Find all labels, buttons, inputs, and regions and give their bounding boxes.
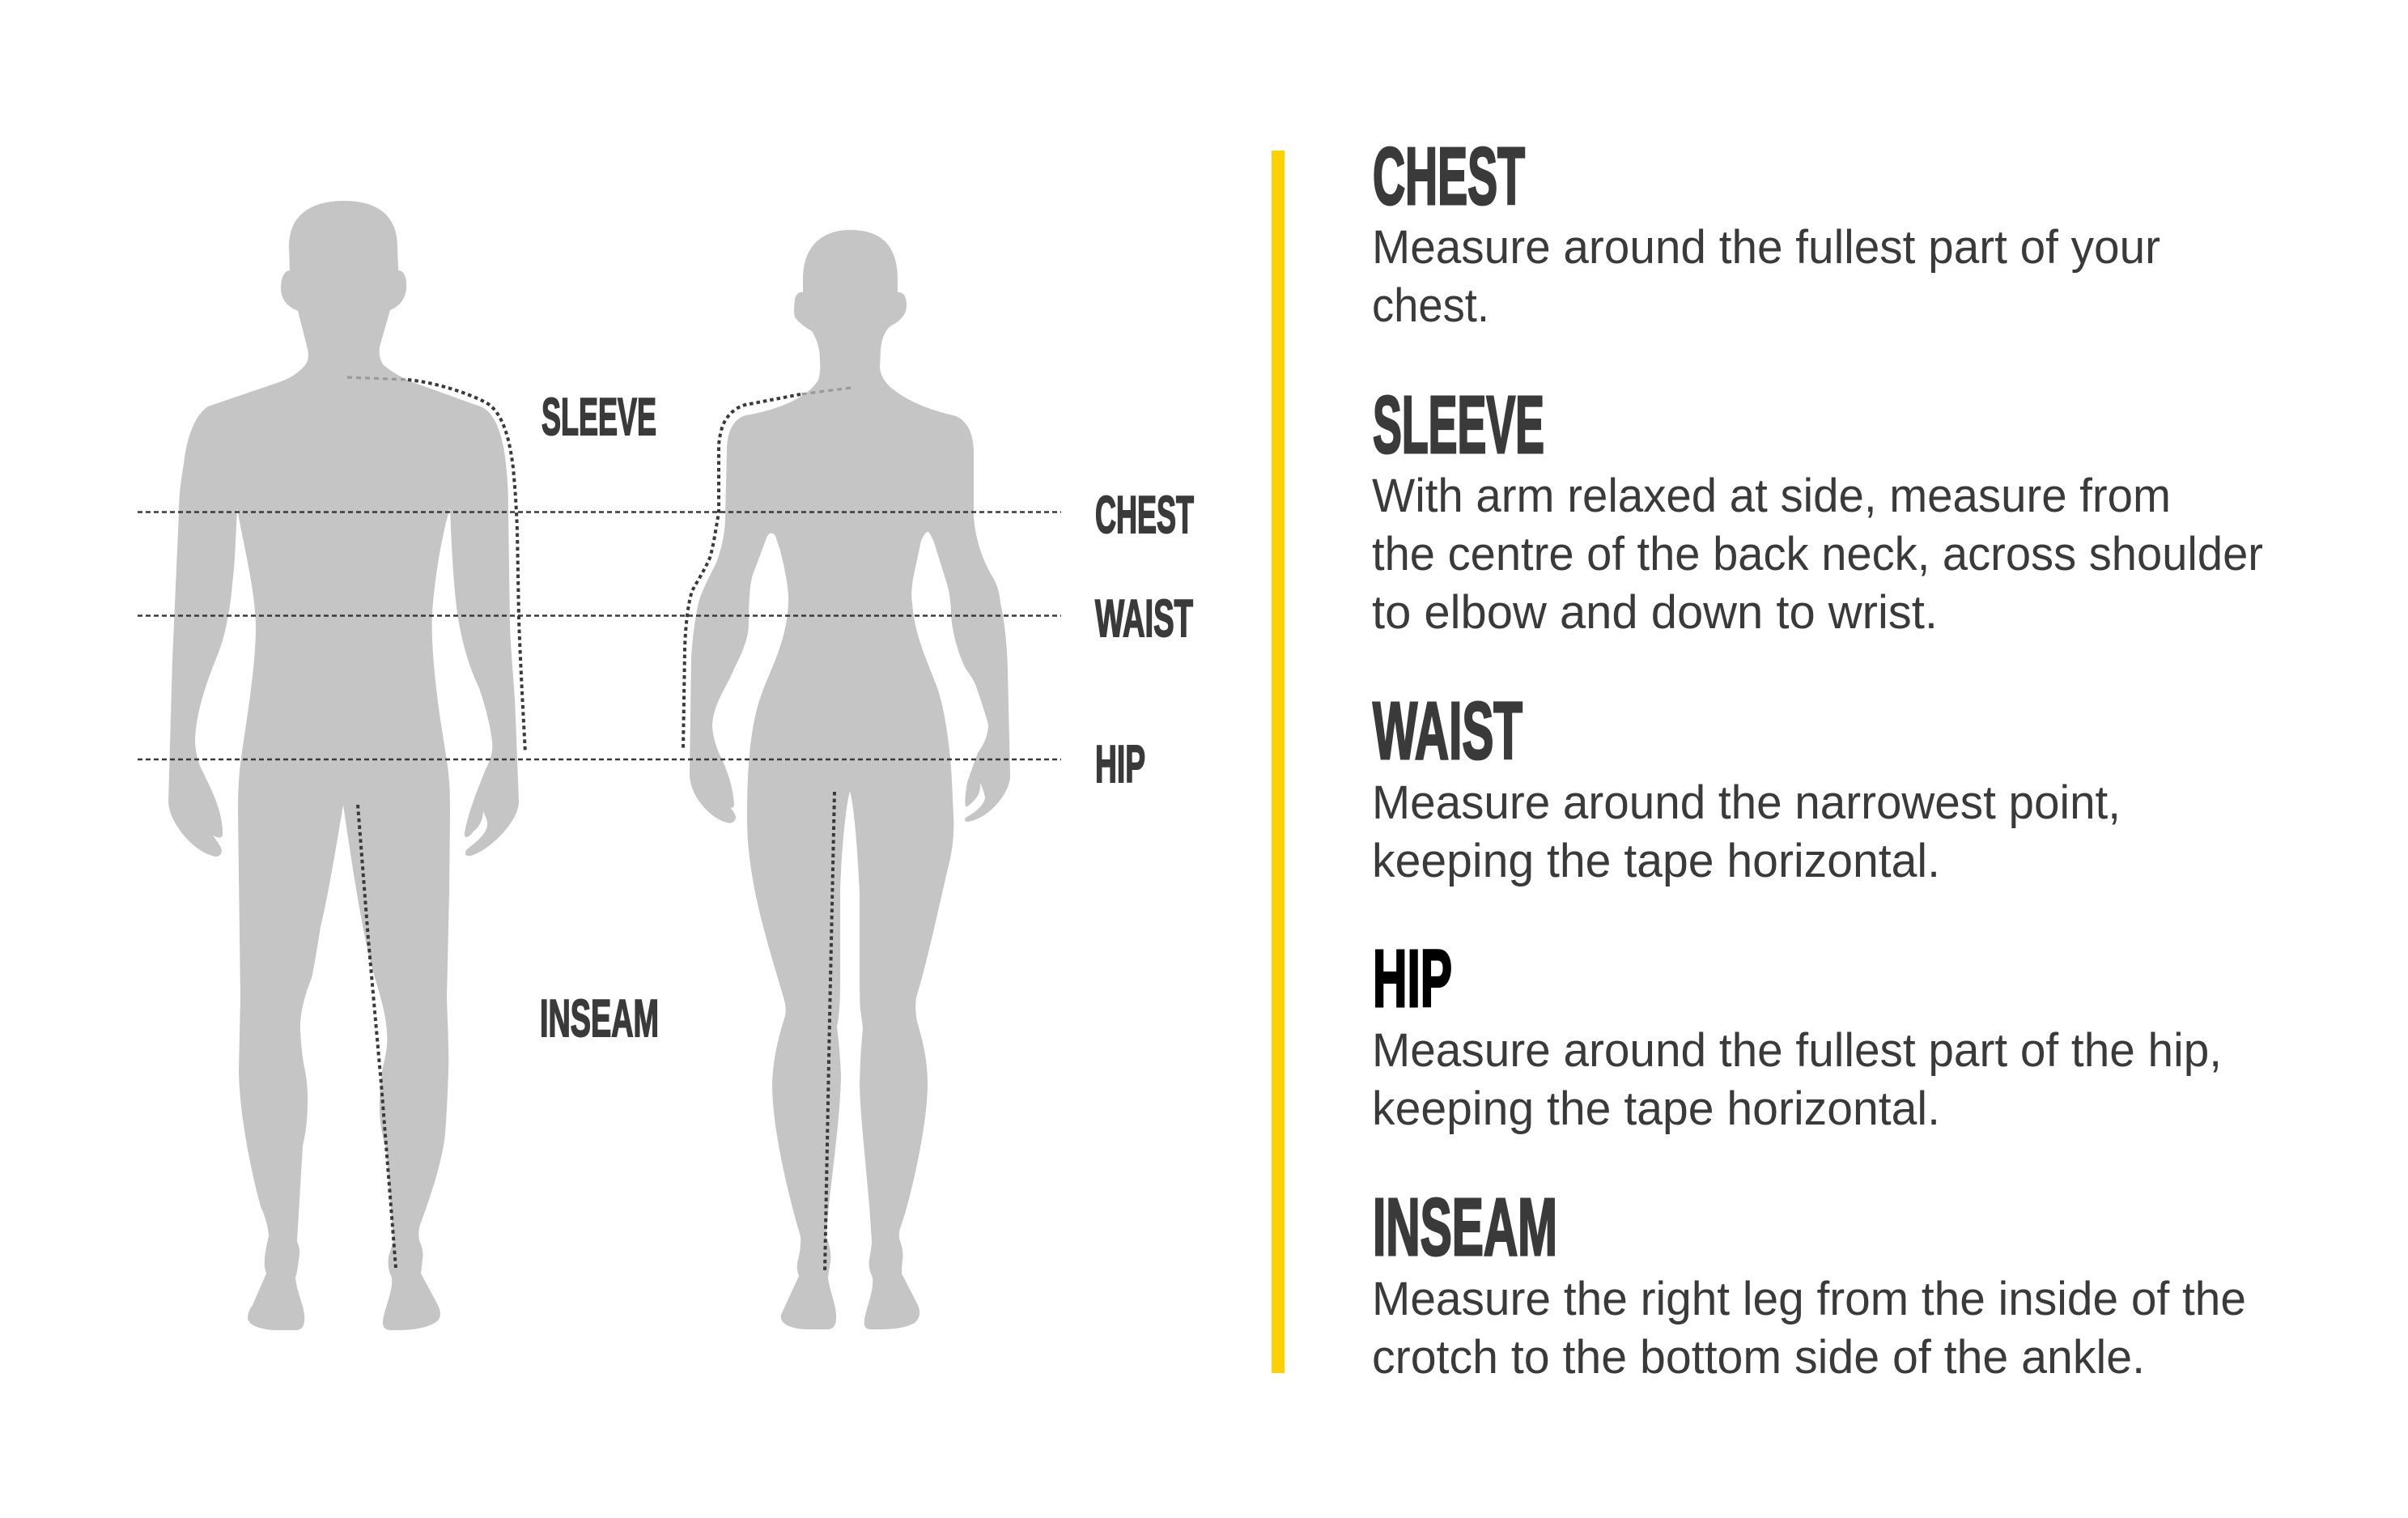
section: hip — [1372, 933, 2222, 1135]
section: sleeve — [1372, 380, 2263, 639]
heading: inseam: INSEAM — [1373, 1182, 1557, 1273]
text: chest instructions: Measure around the fullest part of your — [1372, 221, 2160, 274]
text: chest instructions — [1372, 221, 2160, 332]
heading: hip: HIP — [1373, 933, 1452, 1024]
female silhouette — [690, 230, 1010, 1329]
heading: chest: CHEST — [1373, 131, 1525, 222]
section: inseam — [1372, 1182, 2246, 1384]
male sleeve measure line — [347, 377, 525, 753]
waist tape line — [138, 614, 1061, 617]
text: waist instructions: Measure around the narrowest point, — [1372, 776, 2121, 829]
text: chest instructions: chest. — [1372, 279, 1489, 332]
text: inseam instructions: Measure the right leg from the inside of the — [1372, 1273, 2246, 1325]
text: sleeve instructions: to elbow and down to wrist. — [1372, 586, 1938, 639]
label: sleeve: SLEEVE — [541, 387, 656, 446]
male silhouette — [168, 201, 519, 1330]
hip tape line — [138, 759, 1061, 760]
text: hip instructions: Measure around the fullest part of the hip, — [1372, 1024, 2222, 1077]
heading: sleeve: SLEEVE — [1373, 380, 1544, 470]
section: waist — [1372, 686, 2121, 887]
text: waist instructions — [1372, 776, 2121, 887]
chest tape line — [138, 511, 1061, 513]
section: chest — [1372, 131, 2160, 332]
label: hip: HIP — [1095, 734, 1145, 793]
label: chest: CHEST — [1095, 485, 1194, 544]
text: waist instructions: keeping the tape horizontal. — [1372, 835, 1940, 887]
text: sleeve instructions — [1372, 470, 2263, 639]
text: inseam instructions — [1372, 1273, 2246, 1384]
label: inseam: INSEAM — [540, 989, 659, 1048]
female sleeve measure line — [683, 388, 851, 750]
text: inseam instructions: crotch to the bottom side of the ankle. — [1372, 1331, 2145, 1384]
text: hip instructions — [1372, 1024, 2222, 1135]
heading: waist: WAIST — [1373, 686, 1523, 776]
text: sleeve instructions: the centre of the back neck, across shoulder — [1372, 528, 2263, 580]
text: hip instructions: keeping the tape horizontal. — [1372, 1082, 1940, 1135]
yellow divider — [1272, 151, 1285, 1373]
label: waist: WAIST — [1095, 589, 1193, 648]
text: sleeve instructions: With arm relaxed at side, measure from — [1372, 470, 2171, 522]
female inseam measure line — [825, 792, 835, 1272]
male inseam measure line — [358, 805, 396, 1268]
